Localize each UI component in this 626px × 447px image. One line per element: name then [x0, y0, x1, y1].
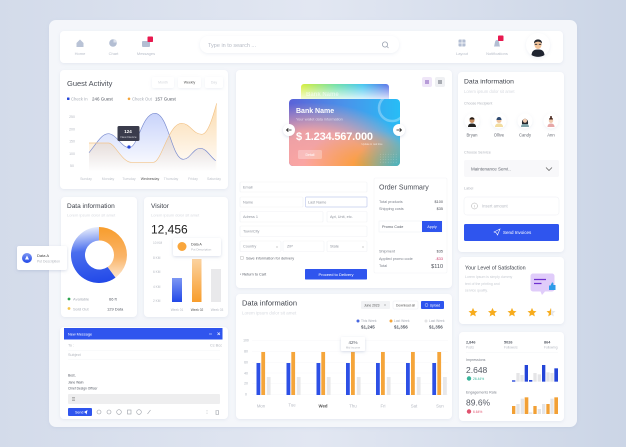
arrow: next	[393, 124, 405, 136]
y axis labels: 100	[243, 338, 249, 342]
impressions metric: 26.44%	[473, 377, 484, 381]
day labels: Sun	[436, 404, 444, 408]
y axis labels: 50	[70, 164, 74, 168]
format toolbar	[68, 394, 220, 404]
x axis labels: Sunday	[80, 177, 92, 181]
order summary: -$33	[435, 257, 443, 261]
callout: data A orange: Data A	[191, 242, 202, 246]
nav item: notifications	[486, 36, 508, 56]
panel: new message: Cc Bcc	[210, 344, 222, 348]
order summary: Shipping costs	[379, 207, 404, 211]
delivery form: Save information for delivery	[246, 256, 294, 260]
y axis labels: 8 KM	[153, 256, 161, 260]
order summary: Shipment	[379, 250, 396, 254]
rear bank card	[301, 84, 389, 99]
panel: social statistics: Posts	[466, 346, 474, 350]
chart legend: Last Week	[394, 319, 410, 323]
x axis labels: Friday	[188, 177, 198, 181]
upload button	[421, 301, 444, 309]
front bank card: $ 1.234.567.000	[296, 131, 373, 143]
engagement metric: 89.6%	[466, 398, 491, 408]
description: service quality.	[465, 288, 488, 292]
message body: Best,	[68, 374, 76, 378]
nav item: messages	[137, 36, 155, 56]
panel: satisfaction: Your Level of Satisfaction	[465, 266, 526, 272]
front bank card	[289, 95, 405, 166]
period buttons: Day	[211, 80, 217, 84]
stat counters: 2,846	[466, 340, 476, 344]
donut legend	[68, 296, 124, 312]
day labels: Tue	[288, 402, 296, 408]
y axis labels: 10 KM	[153, 241, 163, 245]
day labels	[257, 402, 444, 408]
dashboard container	[49, 20, 577, 427]
message header	[64, 328, 222, 340]
y axis labels: 6 KM	[153, 270, 161, 274]
chart legend	[356, 319, 445, 330]
period buttons: Month	[158, 80, 168, 84]
panel: donut data information: Lorem ipsum dolor sit amet	[67, 212, 116, 218]
y axis labels: 150	[69, 140, 75, 144]
button: proceed to delivery	[305, 269, 367, 280]
delivery form: State	[330, 244, 339, 248]
panel: right data information: Choose Recipient	[464, 102, 492, 106]
period buttons	[152, 77, 223, 88]
recipient: Bryan: Bryan	[467, 132, 478, 138]
y axis labels: 100	[69, 152, 75, 156]
date select: June 2023	[364, 303, 380, 307]
nav item: chart	[109, 39, 119, 56]
view toggle buttons	[422, 77, 445, 87]
impressions metric	[466, 358, 488, 381]
recipient: Candy	[518, 114, 532, 138]
amount input: i	[474, 204, 475, 208]
front bank card: Update in real time	[362, 143, 383, 146]
y axis labels: 60	[244, 360, 248, 364]
donut legend: Sold Out	[73, 306, 89, 312]
delivery form	[240, 182, 367, 260]
panel: satisfaction	[459, 257, 564, 324]
button: send invoices: Send Invoices	[503, 230, 532, 235]
service select	[464, 160, 559, 177]
panel: new message: Subject	[68, 353, 82, 357]
donut legend: 66 ft	[109, 296, 118, 302]
nav item: layout	[456, 40, 469, 56]
order summary: Promo Code	[382, 225, 403, 229]
description: Lorem Ipsum is simply dummy	[465, 275, 513, 279]
recipient: Ann	[544, 114, 558, 138]
chart legend: This Week	[361, 319, 377, 323]
user avatar	[526, 33, 550, 57]
delivery form: Apt, Unit, etc.	[330, 215, 353, 219]
mini bar chart: engagement	[512, 397, 558, 414]
amount input: Insert amount	[482, 204, 508, 208]
panel: new message: To :	[68, 344, 74, 348]
tooltip: 124 new device: 124	[124, 129, 132, 134]
day labels: Sat	[411, 404, 418, 408]
engagement metric	[466, 390, 497, 414]
legend: Check In	[71, 96, 88, 102]
upload button: Upload	[430, 303, 440, 307]
search box	[200, 36, 399, 53]
day labels: Mon	[257, 404, 266, 408]
panel: donut data information: Data information	[67, 203, 115, 210]
front bank card: Bank Name	[296, 108, 334, 115]
bar chart	[172, 259, 221, 302]
nav item: messages: Messages	[137, 51, 155, 56]
top navigation bar	[60, 31, 563, 63]
download button: Download all	[396, 303, 415, 307]
nav item: notifications: Notifications	[486, 51, 508, 56]
donut legend: 129 Data	[107, 306, 124, 312]
panel: social statistics: Followers	[504, 346, 518, 350]
day labels: Fri	[380, 404, 386, 408]
order summary: $110	[431, 264, 443, 270]
delivery form: Email	[243, 186, 253, 190]
message body	[68, 374, 98, 390]
area line chart	[89, 103, 217, 172]
period buttons: Weekly	[184, 80, 195, 84]
order summary: Total	[379, 264, 387, 268]
panel: weekly data information: Data information	[242, 298, 297, 308]
message body: Chief Design Officer	[68, 386, 98, 390]
order summary	[374, 178, 447, 273]
y axis labels: 0	[245, 392, 247, 396]
y axis labels: 20	[244, 382, 248, 386]
panel: right data information	[458, 72, 564, 252]
description	[465, 275, 513, 292]
panel: weekly data information	[236, 294, 452, 419]
chart tooltip: Mid income	[346, 346, 361, 350]
callout: data A left: Put Description	[37, 260, 60, 264]
panel: right data information: Lorem ipsum dolor sit amet	[464, 89, 515, 94]
day labels: Wed	[318, 404, 328, 408]
rear bank card: Bank Name	[306, 92, 339, 98]
week labels: Week 01	[171, 308, 183, 312]
stat counters: 5026	[504, 340, 512, 344]
week labels: Week 02	[191, 308, 203, 312]
x axis labels: Thursday	[164, 177, 179, 181]
stat counters: 864	[544, 340, 551, 344]
grouped bar chart	[256, 352, 447, 395]
recipient: Candy: Candy	[519, 132, 532, 138]
panel: visitor: Visitor	[151, 203, 170, 210]
panel: visitor	[144, 197, 228, 317]
y axis labels	[69, 115, 75, 168]
delivery form: Country	[243, 244, 256, 248]
panel: new message	[60, 327, 228, 419]
panel: guest activity	[60, 70, 228, 189]
delivery form: Adress 1	[243, 215, 258, 219]
order summary: $100	[435, 200, 443, 204]
y axis labels	[153, 241, 163, 303]
engagement metric: Engagements Rate	[466, 390, 497, 394]
panel: visitor: 12,456	[151, 222, 188, 236]
send button	[68, 408, 92, 416]
star rating	[468, 308, 556, 316]
callout: data A orange: Put Description	[191, 248, 212, 252]
y axis labels: 200	[69, 128, 75, 132]
chart legend: $1,356	[429, 324, 443, 330]
x axis labels: Saturday	[207, 177, 221, 181]
order summary: $35	[437, 207, 443, 211]
service select: Maintenance Servi..	[471, 166, 511, 172]
order summary: Order Summary	[379, 184, 429, 192]
heading: guest activity: Guest Activity	[67, 79, 113, 88]
donut legend: Available	[73, 296, 90, 302]
delivery form: Town/City	[243, 230, 260, 234]
nav item: home: Home	[75, 51, 86, 56]
y axis labels: 250	[69, 115, 75, 119]
return to cart link: ‹ Return to Cart	[240, 272, 267, 276]
recipient: Bryan	[464, 114, 480, 138]
week labels: Week 03	[211, 308, 223, 312]
chart tooltip	[341, 337, 365, 351]
legend: 246 Guest	[92, 96, 114, 102]
delivery form: Last Name	[308, 200, 326, 204]
callout: data A left: Data A	[37, 253, 49, 258]
impressions metric: Impressions	[466, 358, 486, 362]
icon: chat bubble with thumbs up	[530, 274, 556, 295]
y axis labels	[243, 338, 249, 396]
recipient: Olive: Ollive	[494, 132, 505, 138]
impressions metric: 2.648	[466, 365, 488, 375]
chart legend: $1,356	[394, 324, 408, 330]
message body: Jane Wain	[68, 380, 84, 384]
callout: data A orange	[173, 238, 221, 256]
chart tooltip: 42%	[348, 340, 358, 345]
x axis labels	[80, 177, 221, 181]
order summary: Apply	[427, 225, 437, 229]
legend: 157 Guest	[155, 96, 177, 102]
day labels: Thu	[349, 404, 357, 408]
x axis labels: Wednesday	[141, 177, 159, 181]
panel: visitor: Lorem ipsum dolor sit amet	[151, 212, 200, 218]
panel: right data information: Choose Service	[464, 150, 491, 154]
donut chart	[71, 227, 127, 283]
nav item: chart: Chart	[109, 51, 119, 56]
y axis labels: 80	[244, 350, 248, 354]
legend	[67, 96, 177, 102]
callout: data A left	[17, 246, 67, 270]
button: send invoices	[464, 224, 559, 241]
arrow: previous	[283, 124, 295, 136]
front bank card: Your wallet data information	[296, 118, 343, 122]
y axis labels: 2 KM	[153, 299, 161, 303]
recipient: Olive	[492, 114, 506, 138]
action icons	[97, 410, 219, 414]
date select	[361, 301, 390, 309]
delivery form: ZIP	[287, 244, 293, 248]
tooltip: 124 new device	[118, 126, 140, 141]
order summary: $35	[437, 250, 443, 254]
tooltip: 124 new device: New Device	[120, 135, 137, 139]
front bank card: Detail	[306, 153, 315, 157]
download button	[393, 301, 418, 309]
legend: Check Out	[132, 96, 153, 102]
engagement metric: 6.64%	[473, 410, 482, 414]
message header: New Message	[68, 332, 92, 336]
panel: weekly data information: Lorem ipsum dolor sit amet	[242, 310, 297, 316]
nav item: home	[75, 40, 86, 56]
mini bar chart: impressions	[512, 365, 558, 382]
order summary: Total products	[379, 200, 403, 204]
panel: right data information: Label	[464, 186, 473, 190]
chart legend: Last Week	[429, 319, 445, 323]
y axis labels: 40	[244, 372, 248, 376]
panel: donut data information	[61, 197, 137, 317]
nav item: layout: Layout	[456, 51, 469, 56]
y axis labels: 4 KM	[153, 285, 161, 289]
panel: social statistics	[459, 332, 564, 421]
week labels	[171, 308, 223, 312]
stat counters	[466, 340, 551, 344]
panel: social statistics: Following	[544, 346, 558, 350]
send button: Send	[75, 410, 83, 414]
chart legend: $1,245	[361, 324, 375, 330]
order summary: Applied promo code	[379, 257, 413, 261]
recipient: Ann: Ann	[547, 132, 555, 138]
search box: Type in to search ...	[208, 43, 256, 49]
description: text of the printing and	[465, 282, 500, 286]
panel: bank card and checkout	[236, 70, 452, 288]
panel: right data information: Data information	[464, 78, 514, 86]
x axis labels: Tuesday	[122, 177, 136, 181]
delivery form: Name	[243, 200, 253, 204]
x axis labels: Monday	[102, 177, 114, 181]
amount input	[464, 197, 559, 215]
button: proceed to delivery: Proceed to Delivery	[319, 272, 353, 277]
